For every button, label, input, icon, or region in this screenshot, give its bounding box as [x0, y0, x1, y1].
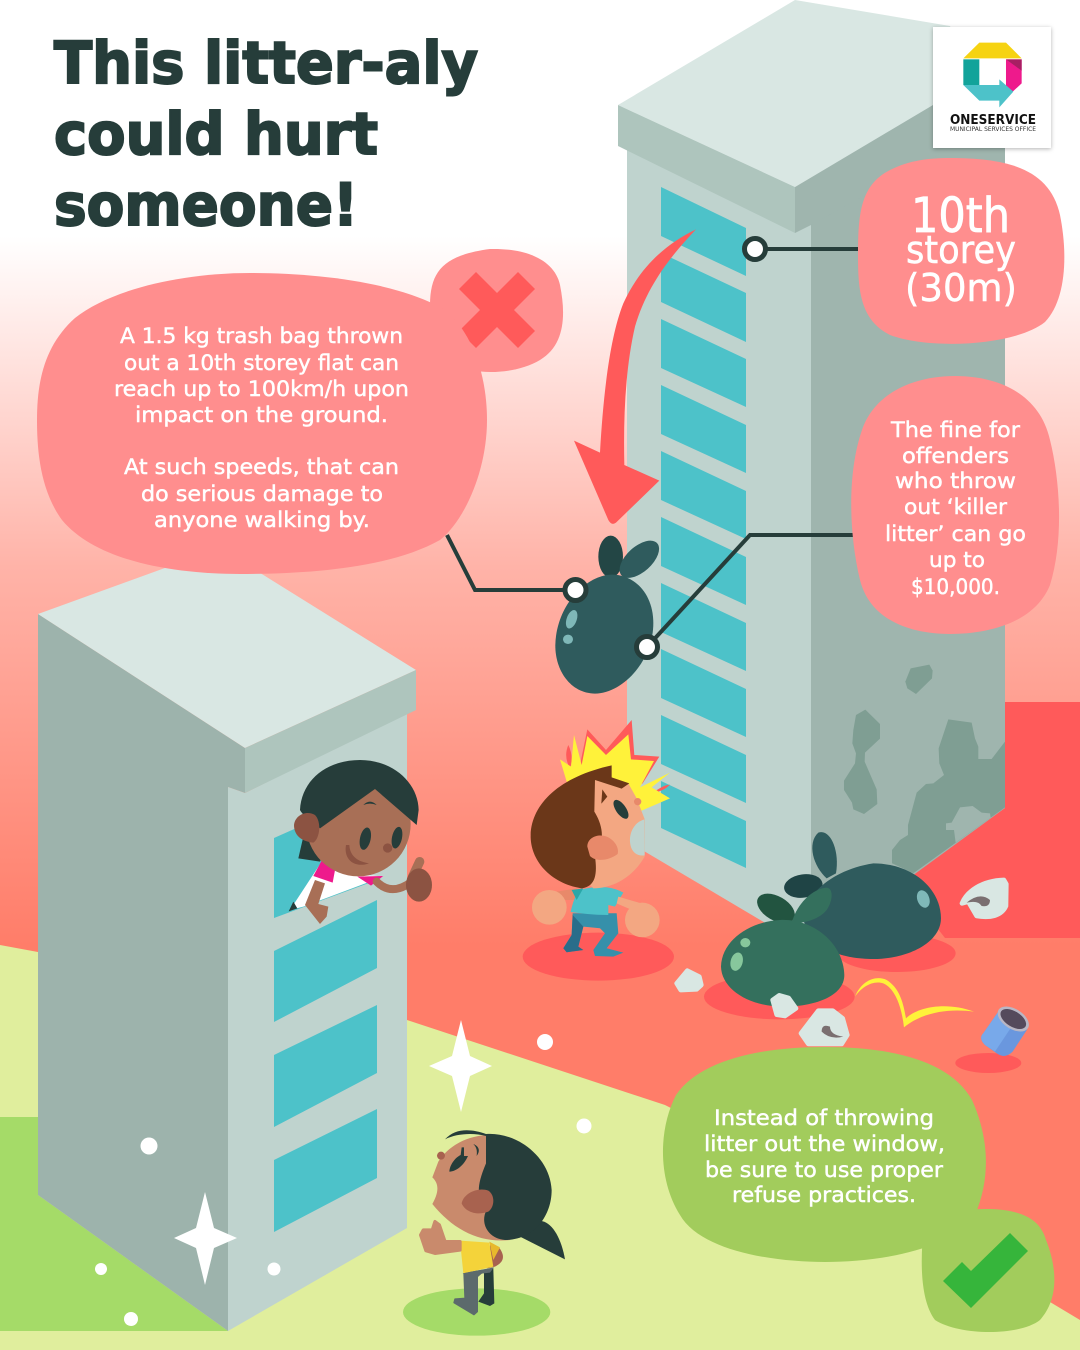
boy mouth	[630, 819, 645, 856]
connector lines	[447, 249, 858, 647]
advice text: Instead of throwing	[714, 1106, 934, 1130]
boy head	[567, 780, 645, 888]
height bubble: storey	[906, 228, 1016, 272]
girl nose	[437, 1152, 445, 1160]
fine bubble: litter’ can go	[885, 522, 1026, 546]
sparkles and dots	[95, 1020, 592, 1326]
yellow bounce trail	[855, 978, 974, 1027]
fine bubble: out ‘killer	[904, 495, 1007, 519]
roof lip side	[795, 80, 1005, 233]
red spark outline	[566, 720, 670, 793]
fine bubble	[851, 376, 1059, 634]
impact bubble with cross	[37, 249, 563, 574]
girl eyes	[358, 826, 373, 851]
angry boy	[523, 720, 674, 981]
girl on ground	[403, 1130, 565, 1336]
impact text: out a 10th storey flat can	[124, 351, 399, 375]
left building	[38, 548, 416, 1331]
girl shadow	[403, 1288, 550, 1336]
paper scraps	[677, 880, 1006, 1044]
left building side face	[38, 614, 245, 1331]
left building front face	[228, 712, 407, 1331]
building windows	[661, 187, 746, 868]
impact text: do serious damage to	[141, 482, 383, 506]
trash bags and rubbish	[677, 832, 1033, 1073]
advice bubble with check	[663, 1047, 1054, 1332]
falling trash bag	[555, 534, 666, 694]
dark bag	[783, 832, 941, 959]
left building roof	[38, 548, 416, 748]
red cross icon	[459, 272, 535, 348]
boy ear	[587, 835, 618, 860]
green check icon	[943, 1233, 1028, 1308]
girl shirt	[460, 1241, 493, 1273]
title	[54, 29, 478, 239]
red pavement behind building	[900, 702, 1080, 938]
girl head	[306, 772, 411, 876]
bubble shape	[663, 1047, 986, 1262]
boy shirt	[571, 887, 623, 915]
light green lawn	[0, 945, 1080, 1350]
girl at window	[289, 760, 432, 924]
girl sleeve white	[290, 862, 383, 910]
boy eye	[611, 797, 631, 821]
check badge	[922, 1209, 1054, 1332]
impact text: A 1.5 kg trash bag thrown	[120, 324, 403, 348]
boy nose	[634, 798, 641, 805]
girl ear	[294, 813, 319, 843]
girl eyebrow	[363, 802, 377, 805]
girl legs	[478, 1268, 494, 1306]
scrap swirls	[822, 896, 990, 1038]
girl nose	[383, 843, 392, 853]
left roof lip	[245, 670, 416, 793]
connector end dots	[565, 238, 766, 658]
girl eyebrow	[473, 1144, 479, 1156]
wall cracks	[844, 665, 1005, 873]
fine bubble: The fine for	[890, 418, 1020, 442]
advice text: refuse practices.	[732, 1183, 916, 1207]
girl ear	[462, 1189, 493, 1213]
dark green lawn patch	[0, 1117, 228, 1331]
girl smile	[346, 845, 369, 865]
girl thumbs up arm	[377, 862, 420, 889]
cross badge	[430, 249, 563, 372]
impact text: anyone walking by.	[154, 508, 370, 532]
advice text	[704, 1106, 945, 1207]
fine bubble: who throw	[895, 469, 1016, 493]
title: someone!	[54, 171, 358, 239]
girl pink shirt	[313, 859, 336, 883]
logo: OneService	[933, 27, 1051, 148]
building side face	[811, 95, 1005, 950]
boy fists	[532, 890, 567, 925]
boy arm front	[617, 897, 647, 915]
bag shadows	[838, 935, 956, 972]
tin can	[981, 1001, 1033, 1056]
girl arm	[305, 880, 328, 924]
height bubble: (30m)	[905, 266, 1017, 310]
logo: OneService: ONESERVICE	[950, 113, 1036, 128]
fine bubble: offenders	[902, 444, 1009, 468]
falling arrow	[574, 229, 696, 524]
building front face	[627, 140, 811, 950]
girl hair	[300, 760, 419, 828]
title: This litter-aly	[54, 29, 478, 97]
girl hand	[421, 1222, 460, 1253]
boy legs	[563, 913, 623, 957]
yellow burst	[560, 734, 670, 811]
fine bubble: $10,000.	[911, 575, 1000, 599]
fine bubble: up to	[929, 548, 985, 572]
girl back arm	[487, 1245, 503, 1268]
title: could hurt	[54, 100, 378, 168]
roof lip front	[618, 105, 795, 233]
girl back hair	[298, 837, 327, 862]
advice text: be sure to use proper	[705, 1158, 943, 1182]
impact text: At such speeds, that can	[124, 455, 399, 479]
height bubble: 10th	[911, 188, 1010, 244]
green bag	[721, 888, 844, 1007]
height bubble	[858, 158, 1064, 344]
boy arm back	[557, 888, 577, 900]
boy hair	[531, 765, 629, 888]
girl hair	[445, 1130, 552, 1240]
boy eyebrow	[601, 789, 607, 803]
left building windows	[274, 822, 377, 1232]
impact text: impact on the ground.	[135, 403, 388, 427]
tall building	[618, 0, 1005, 950]
advice text: litter out the window,	[704, 1132, 945, 1156]
boy shadow	[523, 933, 674, 981]
girl ponytail	[520, 1221, 565, 1259]
girl head	[432, 1135, 510, 1240]
impact text	[114, 324, 409, 532]
logo: OneService: MUNICIPAL SERVICES OFFICE	[950, 126, 1036, 133]
bubble shape	[37, 273, 487, 574]
impact text: reach up to 100km/h upon	[114, 377, 409, 401]
building roof	[618, 0, 975, 187]
girl eye	[449, 1147, 468, 1172]
girl fist	[406, 868, 432, 902]
